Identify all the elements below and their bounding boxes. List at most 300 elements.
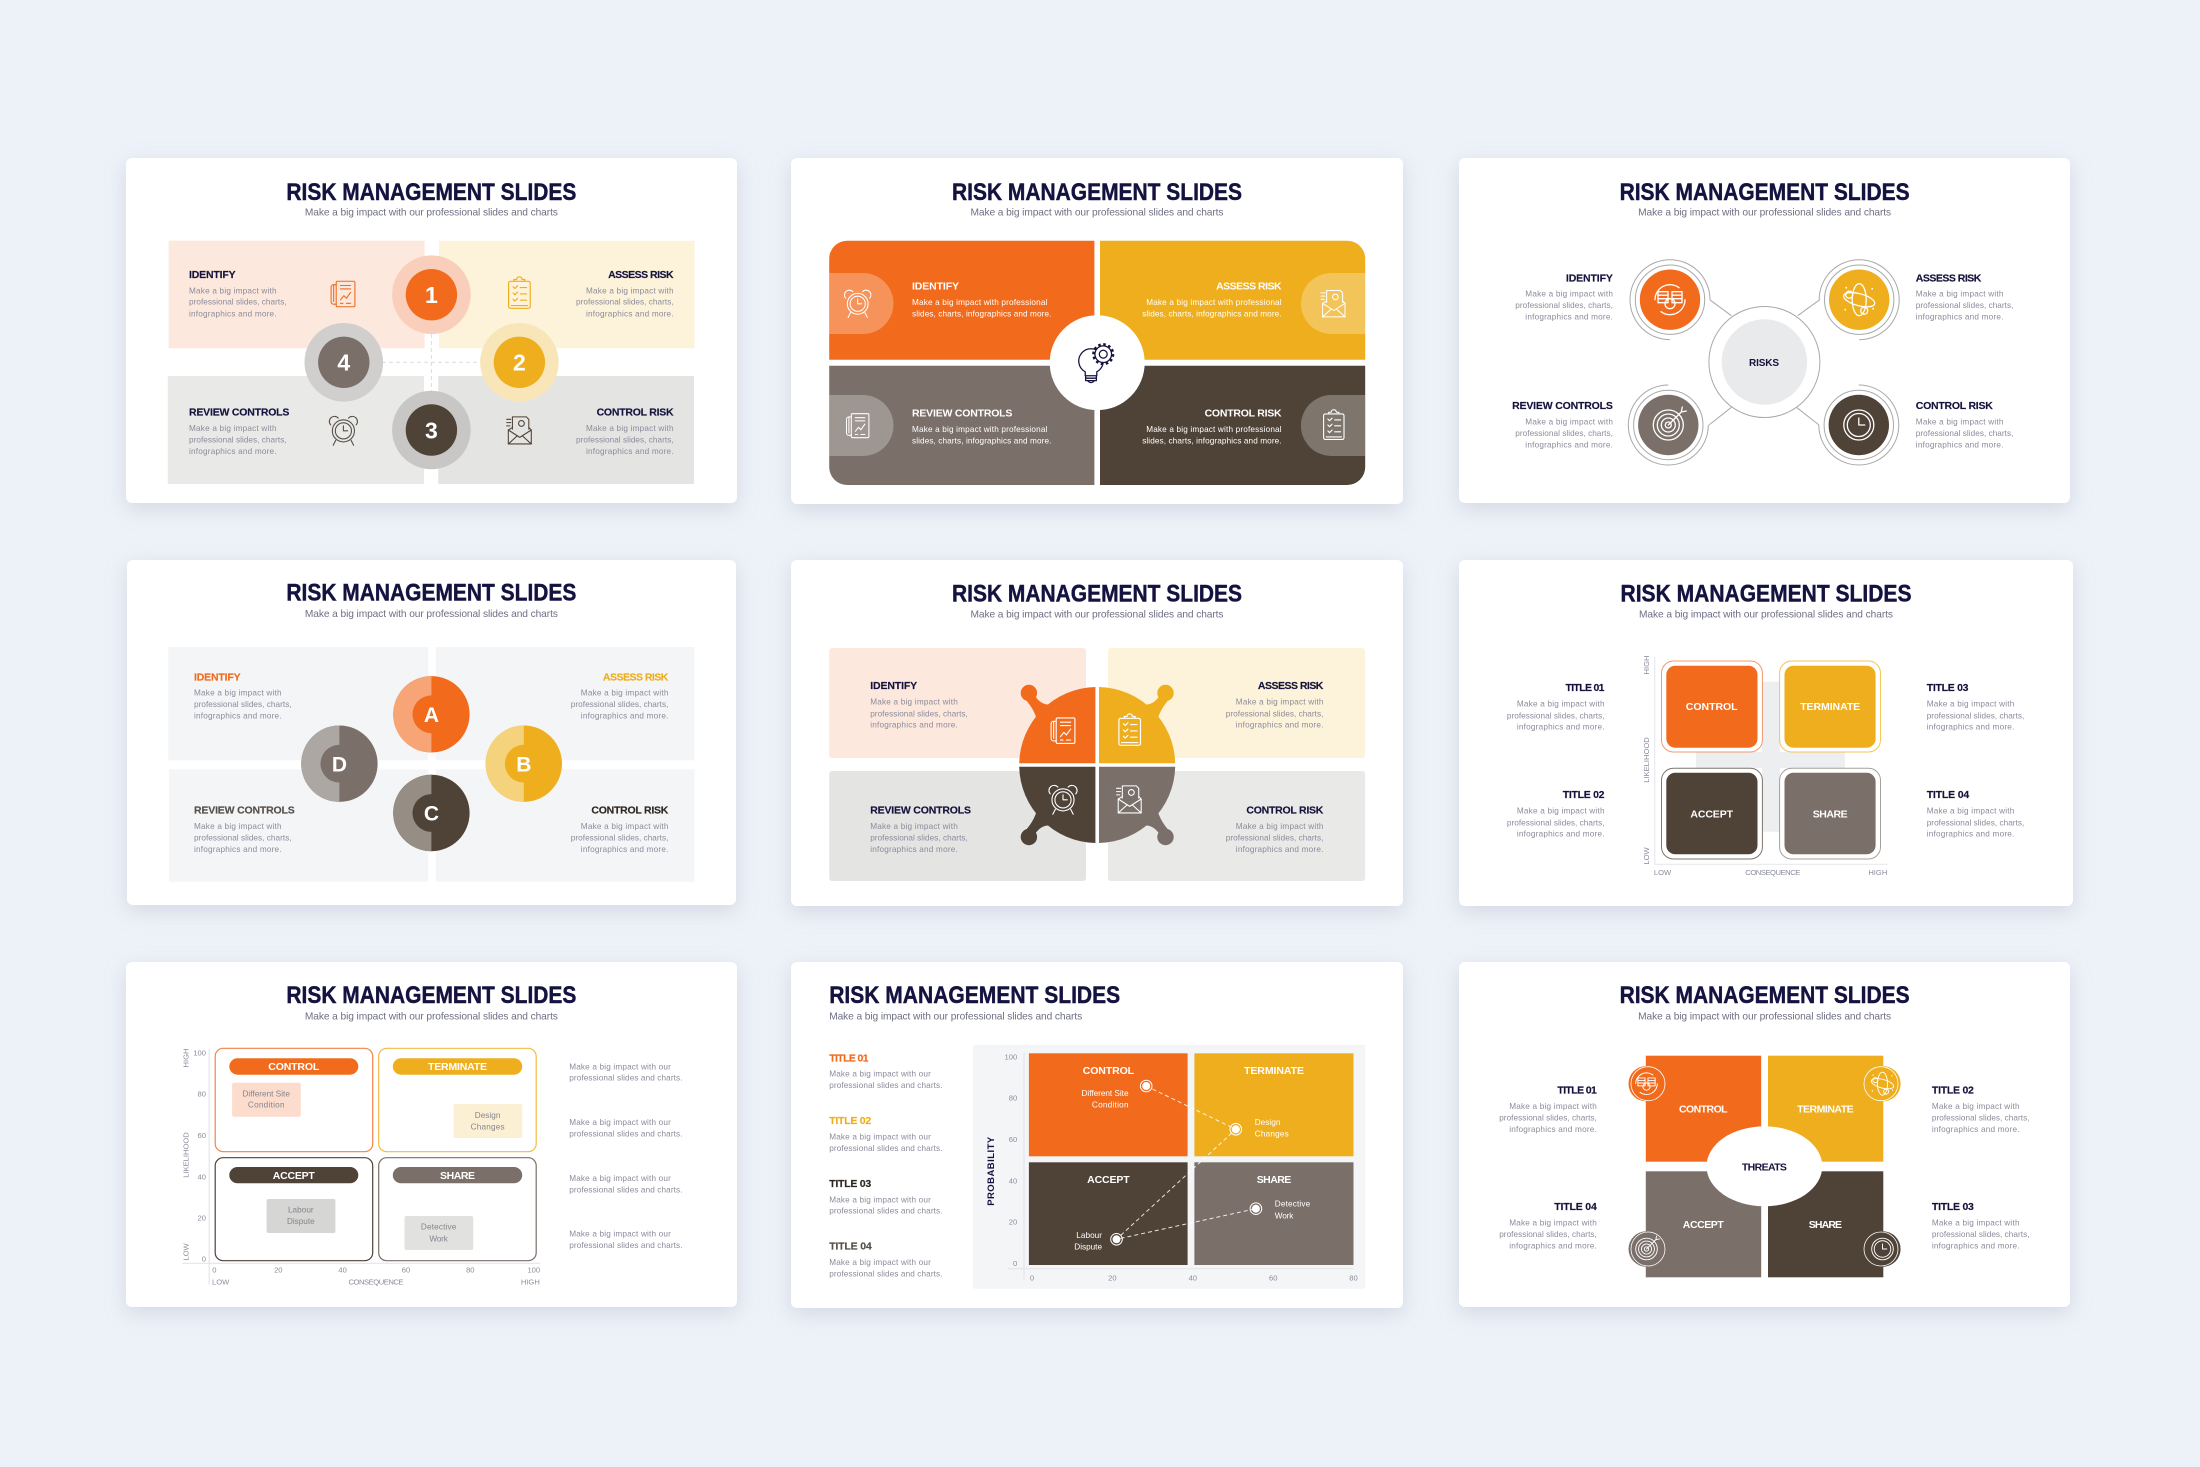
icon: clipboard (1324, 410, 1344, 439)
text: control risk: Make a big impact with professional (1146, 425, 1282, 434)
text: title 03: infographics and more. (1927, 723, 2014, 732)
text: title 01 (1499, 1085, 1597, 1134)
quadrant: share: Work (429, 1234, 449, 1243)
x axis ticks: 0 (1030, 1274, 1034, 1283)
text: review controls: Make a big impact with (870, 822, 958, 831)
text: title 04: Make a big impact with our (829, 1258, 931, 1267)
quadrant: control (1029, 1053, 1188, 1156)
title: RISK MANAGEMENT SLIDES (1620, 982, 1910, 1009)
icon: clipboard (1119, 714, 1140, 745)
text: identify: professional slides, charts, (194, 700, 292, 709)
quadrant: control: Different Site (242, 1089, 290, 1098)
x axis labels: HIGH (521, 1278, 540, 1287)
text: assess risk (1142, 280, 1282, 319)
text: title 04: professional slides and charts. (829, 1270, 942, 1279)
text: title 02: professional slides and charts. (829, 1144, 942, 1153)
text: title 01: infographics and more. (1509, 1125, 1597, 1134)
quadrant: control: Different Site (1082, 1089, 1129, 1098)
grey cross behind tiles (1696, 682, 1845, 832)
quadrant: control (215, 1048, 373, 1152)
text: title 01: professional slides, charts, (1507, 711, 1604, 720)
title: RISK MANAGEMENT SLIDES (286, 982, 576, 1009)
subtitle: Make a big impact with our professional slides and charts (1639, 610, 1893, 621)
text: title 01: professional slides, charts, (1499, 1113, 1597, 1122)
text: review controls: infographics and more. (189, 447, 277, 456)
text: title 04 (829, 1241, 942, 1279)
text: review controls: slides, charts, infographics and more. (912, 437, 1051, 446)
text: identify: Make a big impact with (870, 698, 958, 707)
letter circle A: A (424, 704, 439, 727)
text: title 01: infographics and more. (1517, 723, 1604, 732)
text: review controls: REVIEW CONTROLS (1512, 400, 1613, 412)
corner badge: atom (1864, 1066, 1901, 1101)
number circle 1 (392, 255, 471, 334)
axis lines (1008, 1053, 1354, 1280)
x axis ticks: 100 (527, 1266, 540, 1275)
icon: mail (1321, 290, 1345, 317)
text: assess risk: Make a big impact with (1236, 698, 1324, 707)
text: control risk: infographics and more. (1236, 845, 1323, 854)
text: title 02: Make a big impact with (1517, 807, 1605, 816)
letter circle B: B (516, 753, 531, 776)
text: review controls: Make a big impact with (1525, 418, 1613, 427)
y axis labels: LOW (182, 1243, 190, 1261)
letter circle D (301, 726, 378, 802)
text: control risk: infographics and more. (586, 447, 674, 456)
background tile: identify (169, 241, 425, 348)
x axis labels (1654, 868, 1887, 877)
x axis labels: HIGH (1868, 868, 1887, 877)
quadrant: identify (829, 241, 1094, 360)
quadrant: control: Condition (248, 1101, 285, 1110)
subtitle: Make a big impact with our professional slides and charts (829, 1012, 1082, 1023)
y axis labels: LOW (1642, 847, 1651, 865)
text: assess risk: infographics and more. (1916, 313, 2003, 322)
icon: report (846, 414, 869, 438)
panel: slide 5 segmented circle (791, 560, 1403, 906)
number circle 3: 3 (425, 417, 438, 443)
side notes: professional slides and charts. (569, 1185, 682, 1194)
x axis ticks: 20 (1108, 1274, 1117, 1283)
title: RISK MANAGEMENT SLIDES (1620, 580, 1912, 607)
quadrant: terminate: Design (1255, 1118, 1281, 1127)
quadrant: accept (215, 1158, 373, 1261)
text: identify: infographics and more. (194, 712, 282, 721)
quadrant: terminate: Changes (471, 1122, 505, 1131)
quadrant: terminate: TERMINATE (428, 1061, 487, 1073)
title: RISK MANAGEMENT SLIDES (952, 179, 1242, 206)
quadrant: share: SHARE (1257, 1174, 1291, 1186)
text: identify: slides, charts, infographics and more. (912, 310, 1051, 319)
icon tab: control risk (1301, 395, 1365, 456)
text: identify (194, 671, 292, 721)
number circle 4: 4 (337, 350, 350, 376)
centre ellipse: threats: THREATS (1742, 1161, 1787, 1173)
side notes: professional slides and charts. (569, 1241, 682, 1250)
text: review controls: REVIEW CONTROLS (912, 407, 1012, 419)
text: assess risk: Make a big impact with (586, 286, 674, 295)
x axis ticks: 80 (1349, 1274, 1358, 1283)
text: title 02 (1507, 789, 1605, 839)
text: title 04: TITLE 04 (1554, 1201, 1597, 1213)
text: title 01: TITLE 01 (1566, 682, 1605, 694)
x axis ticks (1030, 1274, 1358, 1283)
side notes: Make a big impact with our (569, 1174, 671, 1183)
quadrant: accept: Dispute (1074, 1242, 1102, 1251)
text: title 02: infographics and more. (1517, 830, 1604, 839)
text: title 03: Make a big impact with (1932, 1219, 2020, 1228)
text: identify: IDENTIFY (194, 671, 241, 683)
hub: risks (1709, 306, 1820, 418)
quadrant: share: Detective (1275, 1200, 1311, 1209)
text: control risk: Make a big impact with (586, 424, 674, 433)
side notes: professional slides and charts. (569, 1130, 682, 1139)
text: title 04: TITLE 04 (829, 1241, 872, 1253)
text: title 01: TITLE 01 (829, 1052, 869, 1064)
text: identify: professional slides, charts, (870, 709, 968, 718)
panel: slide 6 risk matrix tiles (1459, 560, 2073, 906)
text: title 03 (1932, 1201, 2030, 1251)
quadrant: terminate (1768, 1056, 1883, 1162)
text: identify: professional slides, charts, (189, 298, 287, 307)
text: assess risk: ASSESS RISK (1258, 680, 1324, 692)
quadrant: assess risk (1100, 241, 1365, 360)
node: control risk (1819, 385, 1899, 465)
number circle 1: 1 (425, 282, 438, 308)
text: review controls: REVIEW CONTROLS (870, 804, 971, 816)
text: assess risk: infographics and more. (581, 712, 668, 721)
text: review controls (912, 407, 1051, 446)
background tile: identify (829, 648, 1086, 758)
panel: slide 4 lettered circles (127, 560, 736, 905)
panel: slide 2 colour quadrants (791, 158, 1403, 504)
title: RISK MANAGEMENT SLIDES (829, 982, 1120, 1009)
dashed connectors (1116, 1086, 1256, 1239)
letter circle C (393, 775, 470, 851)
text: identify: IDENTIFY (189, 269, 236, 281)
text: control risk: Make a big impact with (581, 822, 669, 831)
text: title 01: Make a big impact with (1517, 700, 1605, 709)
text: control risk: CONTROL RISK (1205, 407, 1282, 419)
tile: terminate (1780, 661, 1880, 752)
icon tab: identify (829, 273, 893, 334)
text: control risk: CONTROL RISK (591, 805, 669, 817)
quadrant: control: CONTROL (268, 1061, 320, 1073)
icon tab: review controls (829, 395, 893, 456)
text: control risk (1226, 804, 1324, 854)
y axis ticks: 80 (1009, 1094, 1017, 1103)
text: control risk: Make a big impact with (1236, 822, 1324, 831)
corner badge: coins (1628, 1066, 1665, 1101)
quadrant: terminate (379, 1048, 536, 1152)
icon: alarm clock (844, 290, 871, 317)
text: control risk: professional slides, charts, (571, 833, 668, 842)
node: assess risk (1819, 260, 1899, 340)
title: RISK MANAGEMENT SLIDES (286, 179, 576, 206)
text: assess risk (576, 269, 674, 318)
title: RISK MANAGEMENT SLIDES (952, 580, 1242, 607)
x axis ticks: 80 (466, 1266, 475, 1275)
text: review controls: Make a big impact with (194, 822, 282, 831)
side notes: professional slides and charts. (569, 1074, 682, 1083)
panel: slide 8 probability matrix (791, 962, 1403, 1308)
text: title 03 (829, 1178, 942, 1216)
y axis labels (1642, 656, 1651, 865)
text: identify: Make a big impact with (1525, 290, 1613, 299)
icon: report (1051, 718, 1075, 743)
subtitle: Make a big impact with our professional slides and charts (305, 208, 558, 219)
text: title 02: professional slides, charts, (1932, 1113, 2030, 1122)
text: identify: infographics and more. (870, 721, 958, 730)
y axis ticks: 60 (198, 1131, 206, 1140)
text: review controls (1512, 400, 1613, 450)
text: title 03: TITLE 03 (1927, 682, 1969, 694)
text: title 02: TITLE 02 (829, 1115, 871, 1127)
x axis labels: CONSEQUENCE (348, 1278, 404, 1287)
text: title 01: TITLE 01 (1557, 1085, 1597, 1097)
text: review controls (189, 407, 289, 456)
subtitle: Make a big impact with our professional slides and charts (1638, 208, 1891, 219)
text: review controls: professional slides, charts, (1515, 429, 1613, 438)
tile: share: SHARE (1813, 808, 1848, 820)
background tile: assess risk (1108, 648, 1365, 758)
y axis labels: LIKELIHOOD (182, 1132, 190, 1178)
centre circle (1050, 315, 1145, 410)
y axis ticks: 100 (1005, 1052, 1017, 1061)
letter circle A (393, 676, 470, 752)
subtitle: Make a big impact with our professional slides and charts (305, 609, 558, 620)
text: control risk: CONTROL RISK (1916, 400, 1993, 412)
segment: grey (1099, 767, 1175, 845)
background tile: review controls (829, 771, 1086, 881)
number circle 2 (480, 323, 559, 402)
text: review controls: professional slides, charts, (189, 435, 287, 444)
quadrant: control: CONTROL (1083, 1065, 1135, 1077)
text: title 03: professional slides, charts, (1932, 1230, 2030, 1239)
x axis ticks: 40 (338, 1266, 347, 1275)
axis lines (1655, 657, 1888, 864)
text: identify (870, 680, 968, 730)
text: control risk: professional slides, charts, (576, 435, 674, 444)
quadrant: review controls (829, 366, 1094, 485)
text: assess risk: professional slides, charts, (576, 298, 674, 307)
subtitle: Make a big impact with our professional slides and charts (970, 208, 1224, 219)
text: review controls: REVIEW CONTROLS (189, 407, 289, 419)
text: control risk (1142, 407, 1282, 446)
hub: risks: RISKS (1749, 358, 1779, 369)
background tile: assess risk (439, 241, 694, 348)
number circle 4 (304, 323, 383, 402)
icon: report (331, 281, 355, 307)
text: title 03: TITLE 03 (1932, 1201, 1974, 1213)
quadrant: share (379, 1158, 536, 1261)
text: title 04: Make a big impact with (1509, 1219, 1597, 1228)
y axis title: PROBABILITY (986, 1136, 997, 1206)
text: control risk: professional slides, charts, (1916, 429, 2013, 438)
text: review controls: Make a big impact with (189, 424, 277, 433)
text: assess risk: Make a big impact with (581, 689, 669, 698)
text: title 03 (1927, 682, 2024, 732)
quadrant: share (1194, 1162, 1354, 1265)
segment: dark brown (1019, 767, 1095, 845)
panel: slide 9 threats matrix (1459, 962, 2070, 1307)
text: title 02: TITLE 02 (1563, 789, 1605, 801)
quadrant: share: SHARE (1809, 1219, 1842, 1231)
text: title 02: infographics and more. (1932, 1125, 2020, 1134)
text: title 01 (829, 1052, 942, 1090)
quadrant: share: Work (1275, 1211, 1294, 1220)
text: title 04: TITLE 04 (1927, 789, 1969, 801)
text: control risk: infographics and more. (1916, 441, 2003, 450)
text: title 03: professional slides and charts. (829, 1207, 942, 1216)
centre ellipse: threats (1706, 1126, 1822, 1206)
tile: share (1780, 768, 1880, 859)
text: control risk: CONTROL RISK (1246, 804, 1324, 816)
tile: accept (1662, 768, 1762, 859)
text: assess risk: professional slides, charts, (1916, 301, 2013, 310)
background tile: review controls (168, 376, 424, 484)
text: control risk: infographics and more. (581, 845, 668, 854)
tile: terminate: TERMINATE (1800, 701, 1860, 713)
data points (1111, 1080, 1262, 1245)
tile: accept: ACCEPT (1690, 808, 1734, 820)
text: identify (912, 280, 1051, 319)
quadrant: terminate: Design (475, 1111, 501, 1120)
text: control risk: CONTROL RISK (597, 407, 674, 419)
text: identify: IDENTIFY (1566, 272, 1613, 284)
icon: bulb and gear (1079, 344, 1113, 383)
text: title 03: professional slides, charts, (1927, 711, 2024, 720)
quadrant: accept: ACCEPT (1683, 1219, 1724, 1231)
x axis labels (212, 1278, 540, 1287)
quadrant: accept: ACCEPT (1087, 1174, 1130, 1186)
y axis ticks: 20 (198, 1214, 206, 1223)
letter circle B (486, 726, 562, 802)
icon: mail (1117, 786, 1141, 813)
quadrant: accept: Labour (288, 1206, 314, 1215)
subtitle: Make a big impact with our professional slides and charts (970, 610, 1224, 621)
text: title 03: TITLE 03 (829, 1178, 871, 1190)
text: title 02: Make a big impact with (1932, 1102, 2020, 1111)
corner badge: target (1628, 1231, 1665, 1267)
title: RISK MANAGEMENT SLIDES (286, 580, 576, 607)
axis lines (182, 1049, 540, 1285)
text: title 04 (1927, 789, 2024, 839)
icon: alarm clock (329, 416, 357, 445)
text: title 01: Make a big impact with our (829, 1070, 931, 1079)
text: review controls: infographics and more. (194, 845, 282, 854)
text: title 02 (829, 1115, 942, 1153)
number circle 2: 2 (513, 350, 526, 376)
y axis labels: HIGH (1642, 656, 1651, 674)
dashed connectors (382, 334, 480, 391)
text: identify (189, 269, 287, 318)
text: review controls: Make a big impact with professional (912, 425, 1048, 434)
text: assess risk (1916, 272, 2013, 322)
x axis ticks: 20 (274, 1266, 283, 1275)
number circle 3 (392, 391, 471, 469)
y axis labels: LIKELIHOOD (1642, 737, 1651, 783)
x axis ticks: 0 (212, 1266, 217, 1275)
text: title 04 (1499, 1201, 1597, 1251)
chart background (973, 1045, 1365, 1289)
text: identify: IDENTIFY (912, 280, 959, 292)
text: title 03: infographics and more. (1932, 1242, 2020, 1251)
y axis ticks: 80 (198, 1090, 206, 1099)
quadrant: accept (1646, 1171, 1761, 1277)
text: assess risk (571, 671, 669, 721)
text: control risk: professional slides, charts, (1226, 833, 1323, 842)
subtitle: Make a big impact with our professional slides and charts (305, 1012, 558, 1023)
text: title 04: Make a big impact with (1927, 807, 2015, 816)
background tile: assess risk (436, 647, 694, 760)
quadrant: accept: Dispute (287, 1217, 315, 1226)
y axis ticks: 0 (202, 1255, 206, 1264)
x axis ticks: 60 (402, 1266, 410, 1275)
text: identify: infographics and more. (1525, 313, 1613, 322)
node: identify (1630, 260, 1710, 340)
quadrant: terminate: Changes (1255, 1130, 1289, 1139)
side notes: Make a big impact with our (569, 1118, 671, 1127)
text: control risk: Make a big impact with (1916, 418, 2004, 427)
connector lines (1709, 300, 1820, 425)
subtitle: Make a big impact with our professional slides and charts (1638, 1012, 1891, 1023)
quadrant: share: Detective (421, 1223, 457, 1232)
quadrant: accept: ACCEPT (273, 1170, 315, 1182)
tile: control (1662, 661, 1762, 752)
text: review controls: infographics and more. (1525, 441, 1613, 450)
quadrant: control (1646, 1056, 1761, 1162)
text: review controls (194, 805, 295, 854)
text: identify: Make a big impact with professional (912, 298, 1048, 307)
text: title 01: Make a big impact with (1509, 1102, 1597, 1111)
text: title 04: professional slides, charts, (1499, 1230, 1597, 1239)
quadrant: terminate: TERMINATE (1797, 1103, 1854, 1115)
text: assess risk: ASSESS RISK (1916, 272, 1982, 284)
letter circle D: D (332, 753, 347, 776)
quadrant: control risk (1100, 366, 1365, 485)
text: identify (1515, 272, 1613, 322)
panel: slide 3 risks hub (1459, 158, 2070, 503)
quadrant: terminate: TERMINATE (1244, 1065, 1304, 1077)
text: title 03: Make a big impact with our (829, 1195, 931, 1204)
text: review controls: professional slides, charts, (194, 833, 292, 842)
text: assess risk (1226, 680, 1324, 730)
segment: orange (1019, 685, 1095, 763)
side notes (569, 1062, 682, 1250)
icon: clipboard (509, 277, 530, 308)
quadrant: terminate (1194, 1053, 1354, 1156)
node: review controls (1628, 385, 1708, 465)
text: review controls (870, 804, 971, 854)
x axis ticks (212, 1266, 540, 1275)
text: title 01: professional slides and charts. (829, 1081, 942, 1090)
side notes: Make a big impact with our (569, 1062, 671, 1071)
side notes: Make a big impact with our (569, 1230, 671, 1239)
background tile: identify (168, 647, 428, 760)
y axis ticks (1005, 1052, 1017, 1268)
text: title 01 (1507, 682, 1605, 732)
text: review controls: infographics and more. (870, 845, 958, 854)
background tile: control risk (436, 769, 694, 882)
text: assess risk: professional slides, charts, (1226, 709, 1323, 718)
background tile: review controls (169, 769, 428, 882)
text: title 02: Make a big impact with our (829, 1132, 931, 1141)
background tile: control risk (438, 376, 694, 484)
panel: slide 7 outlined matrix chart (126, 962, 737, 1307)
quadrant: control: CONTROL (1679, 1103, 1728, 1115)
text: assess risk: infographics and more. (586, 309, 674, 318)
